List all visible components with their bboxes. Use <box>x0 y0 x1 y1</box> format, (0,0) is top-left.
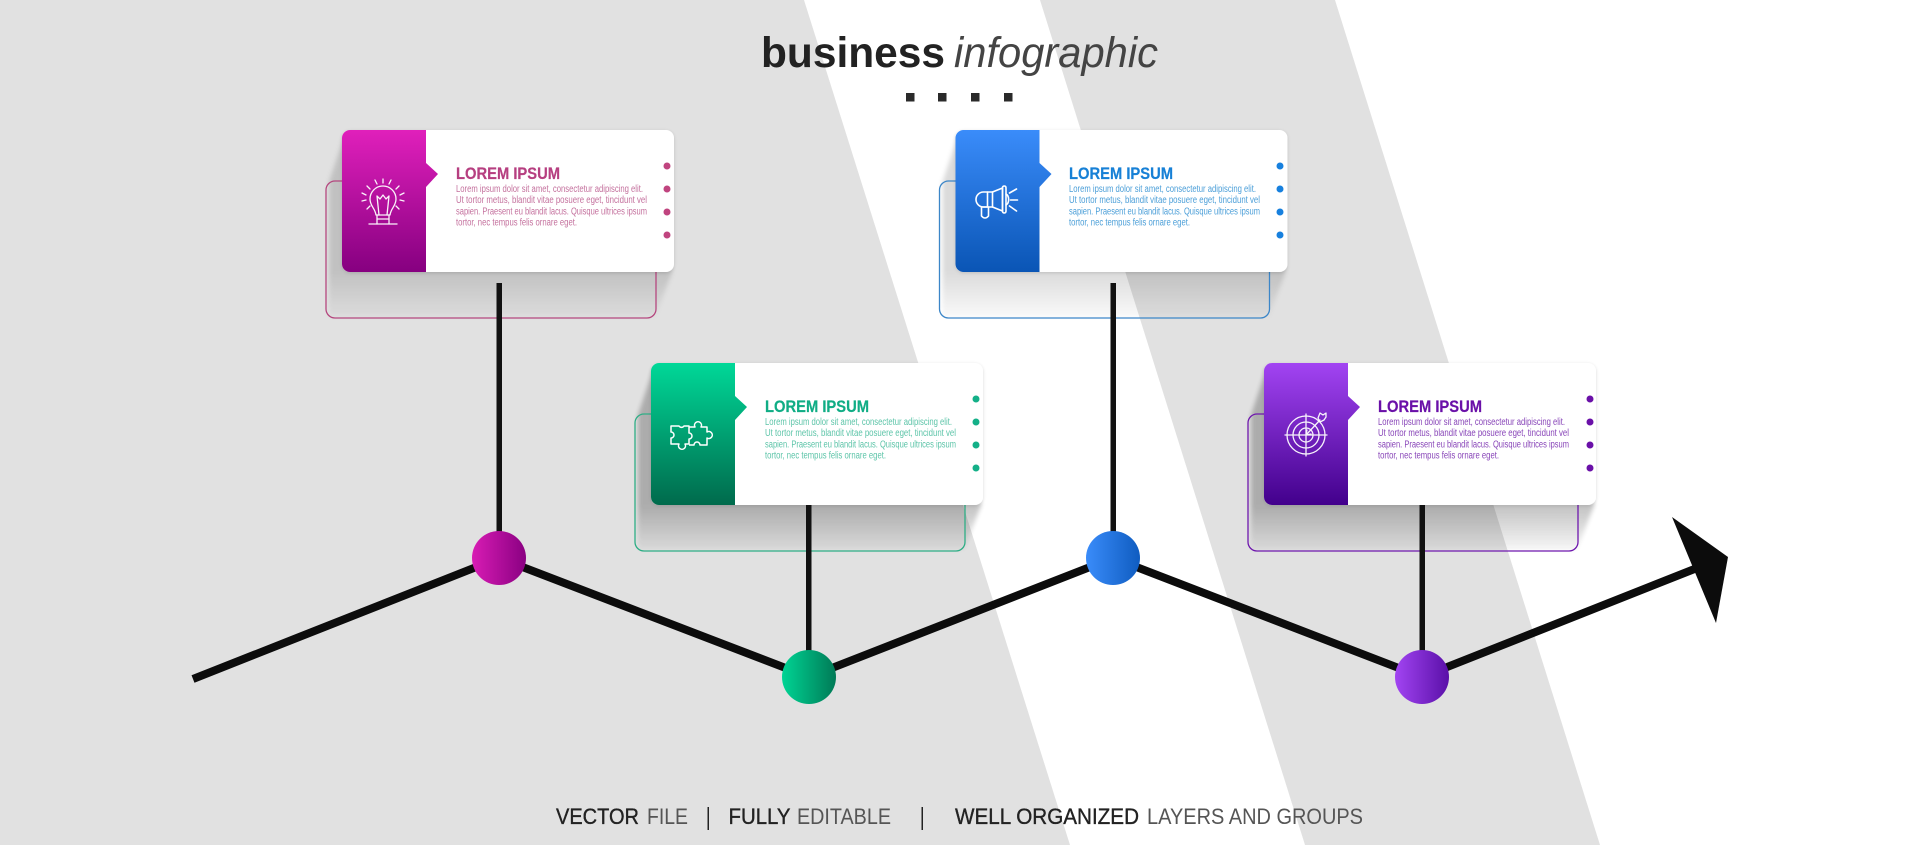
title <box>761 29 1158 77</box>
card 1 colour tab <box>342 130 438 272</box>
card 1 white panel <box>342 130 674 272</box>
title: business <box>761 29 945 77</box>
card 2 body text <box>765 417 956 462</box>
node: blue <box>1086 531 1140 585</box>
card 2 white panel <box>651 363 983 505</box>
card 2 body text: tortor, nec tempus felis ornare eget. <box>765 450 886 462</box>
node: pink <box>472 531 526 585</box>
card 2 body text: Ut tortor metus, blandit vitae posuere eget, tincidunt vel <box>765 428 956 439</box>
footer text: EDITABLE <box>797 804 891 829</box>
footer text: FULLY <box>728 804 791 829</box>
card 1 heading: LOREM IPSUM <box>456 165 560 183</box>
title: infographic <box>954 29 1158 77</box>
card 1 body text: Ut tortor metus, blandit vitae posuere eget, tincidunt vel <box>456 195 647 206</box>
card 4 white panel <box>1264 363 1596 505</box>
card 1 shadow and outline <box>326 134 673 318</box>
card 2 shadow and outline <box>635 367 982 551</box>
card 3 colour tab <box>956 130 1052 272</box>
timeline arrow line <box>193 517 1728 679</box>
icon: lightbulb <box>362 179 404 224</box>
card 2 side dots <box>972 396 980 472</box>
footer text <box>556 804 1363 830</box>
card 4 body text: Lorem ipsum dolor sit amet, consectetur adipiscing elit. <box>1378 417 1565 428</box>
node: purple <box>1395 650 1449 704</box>
card 3 body text: sapien. Praesent eu blandit lacus. Quisque ultrices ipsum <box>1069 206 1260 218</box>
card 3 shadow and outline <box>940 134 1286 318</box>
card 2 body text: Lorem ipsum dolor sit amet, consectetur adipiscing elit. <box>765 417 952 428</box>
card 4 colour tab <box>1264 363 1360 505</box>
card 3 side dots <box>1276 162 1284 238</box>
card 1 body text: sapien. Praesent eu blandit lacus. Quisque ultrices ipsum <box>456 206 647 218</box>
card 3 white panel <box>956 130 1288 272</box>
footer text: LAYERS AND GROUPS <box>1147 804 1363 829</box>
card 3 body text: tortor, nec tempus felis ornare eget. <box>1069 218 1190 228</box>
title dots <box>906 93 1012 102</box>
card 1 body text: tortor, nec tempus felis ornare eget. <box>456 218 577 228</box>
icon: megaphone <box>976 186 1018 218</box>
card 1 body text: Lorem ipsum dolor sit amet, consectetur adipiscing elit. <box>456 184 643 195</box>
card 3 body text: Lorem ipsum dolor sit amet, consectetur adipiscing elit. <box>1069 184 1256 195</box>
card 4: purple target <box>1248 363 1596 551</box>
footer text: VECTOR <box>556 804 639 829</box>
card 4 heading: LOREM IPSUM <box>1378 398 1482 416</box>
card 4 body text: Ut tortor metus, blandit vitae posuere eget, tincidunt vel <box>1378 428 1569 439</box>
card 3: blue megaphone <box>940 130 1288 318</box>
card 3 body text: Ut tortor metus, blandit vitae posuere eget, tincidunt vel <box>1069 195 1260 206</box>
card 2 body text: sapien. Praesent eu blandit lacus. Quisque ultrices ipsum <box>765 440 956 450</box>
card 1 side dots <box>664 162 670 238</box>
node: green <box>782 650 836 704</box>
card 3 body text <box>1069 184 1260 228</box>
card 2 heading: LOREM IPSUM <box>765 398 869 416</box>
card 4 side dots <box>1586 396 1594 472</box>
vertical stems <box>496 283 1425 655</box>
card 3 heading: LOREM IPSUM <box>1069 165 1173 183</box>
card 1 body text <box>456 184 647 228</box>
card 1: pink lightbulb <box>326 130 674 318</box>
card 4 body text: sapien. Praesent eu blandit lacus. Quisque ultrices ipsum <box>1378 440 1569 450</box>
footer text: FILE <box>647 804 688 829</box>
card 4 body text <box>1378 417 1569 462</box>
card 4 body text: tortor, nec tempus felis ornare eget. <box>1378 450 1499 462</box>
footer text: WELL ORGANIZED <box>955 804 1139 829</box>
icon: puzzle pieces <box>671 422 712 449</box>
icon: target with arrow <box>1285 413 1327 456</box>
card 4 shadow and outline <box>1248 367 1595 551</box>
card 2 colour tab <box>651 363 747 505</box>
card 2: green puzzle <box>635 363 983 551</box>
